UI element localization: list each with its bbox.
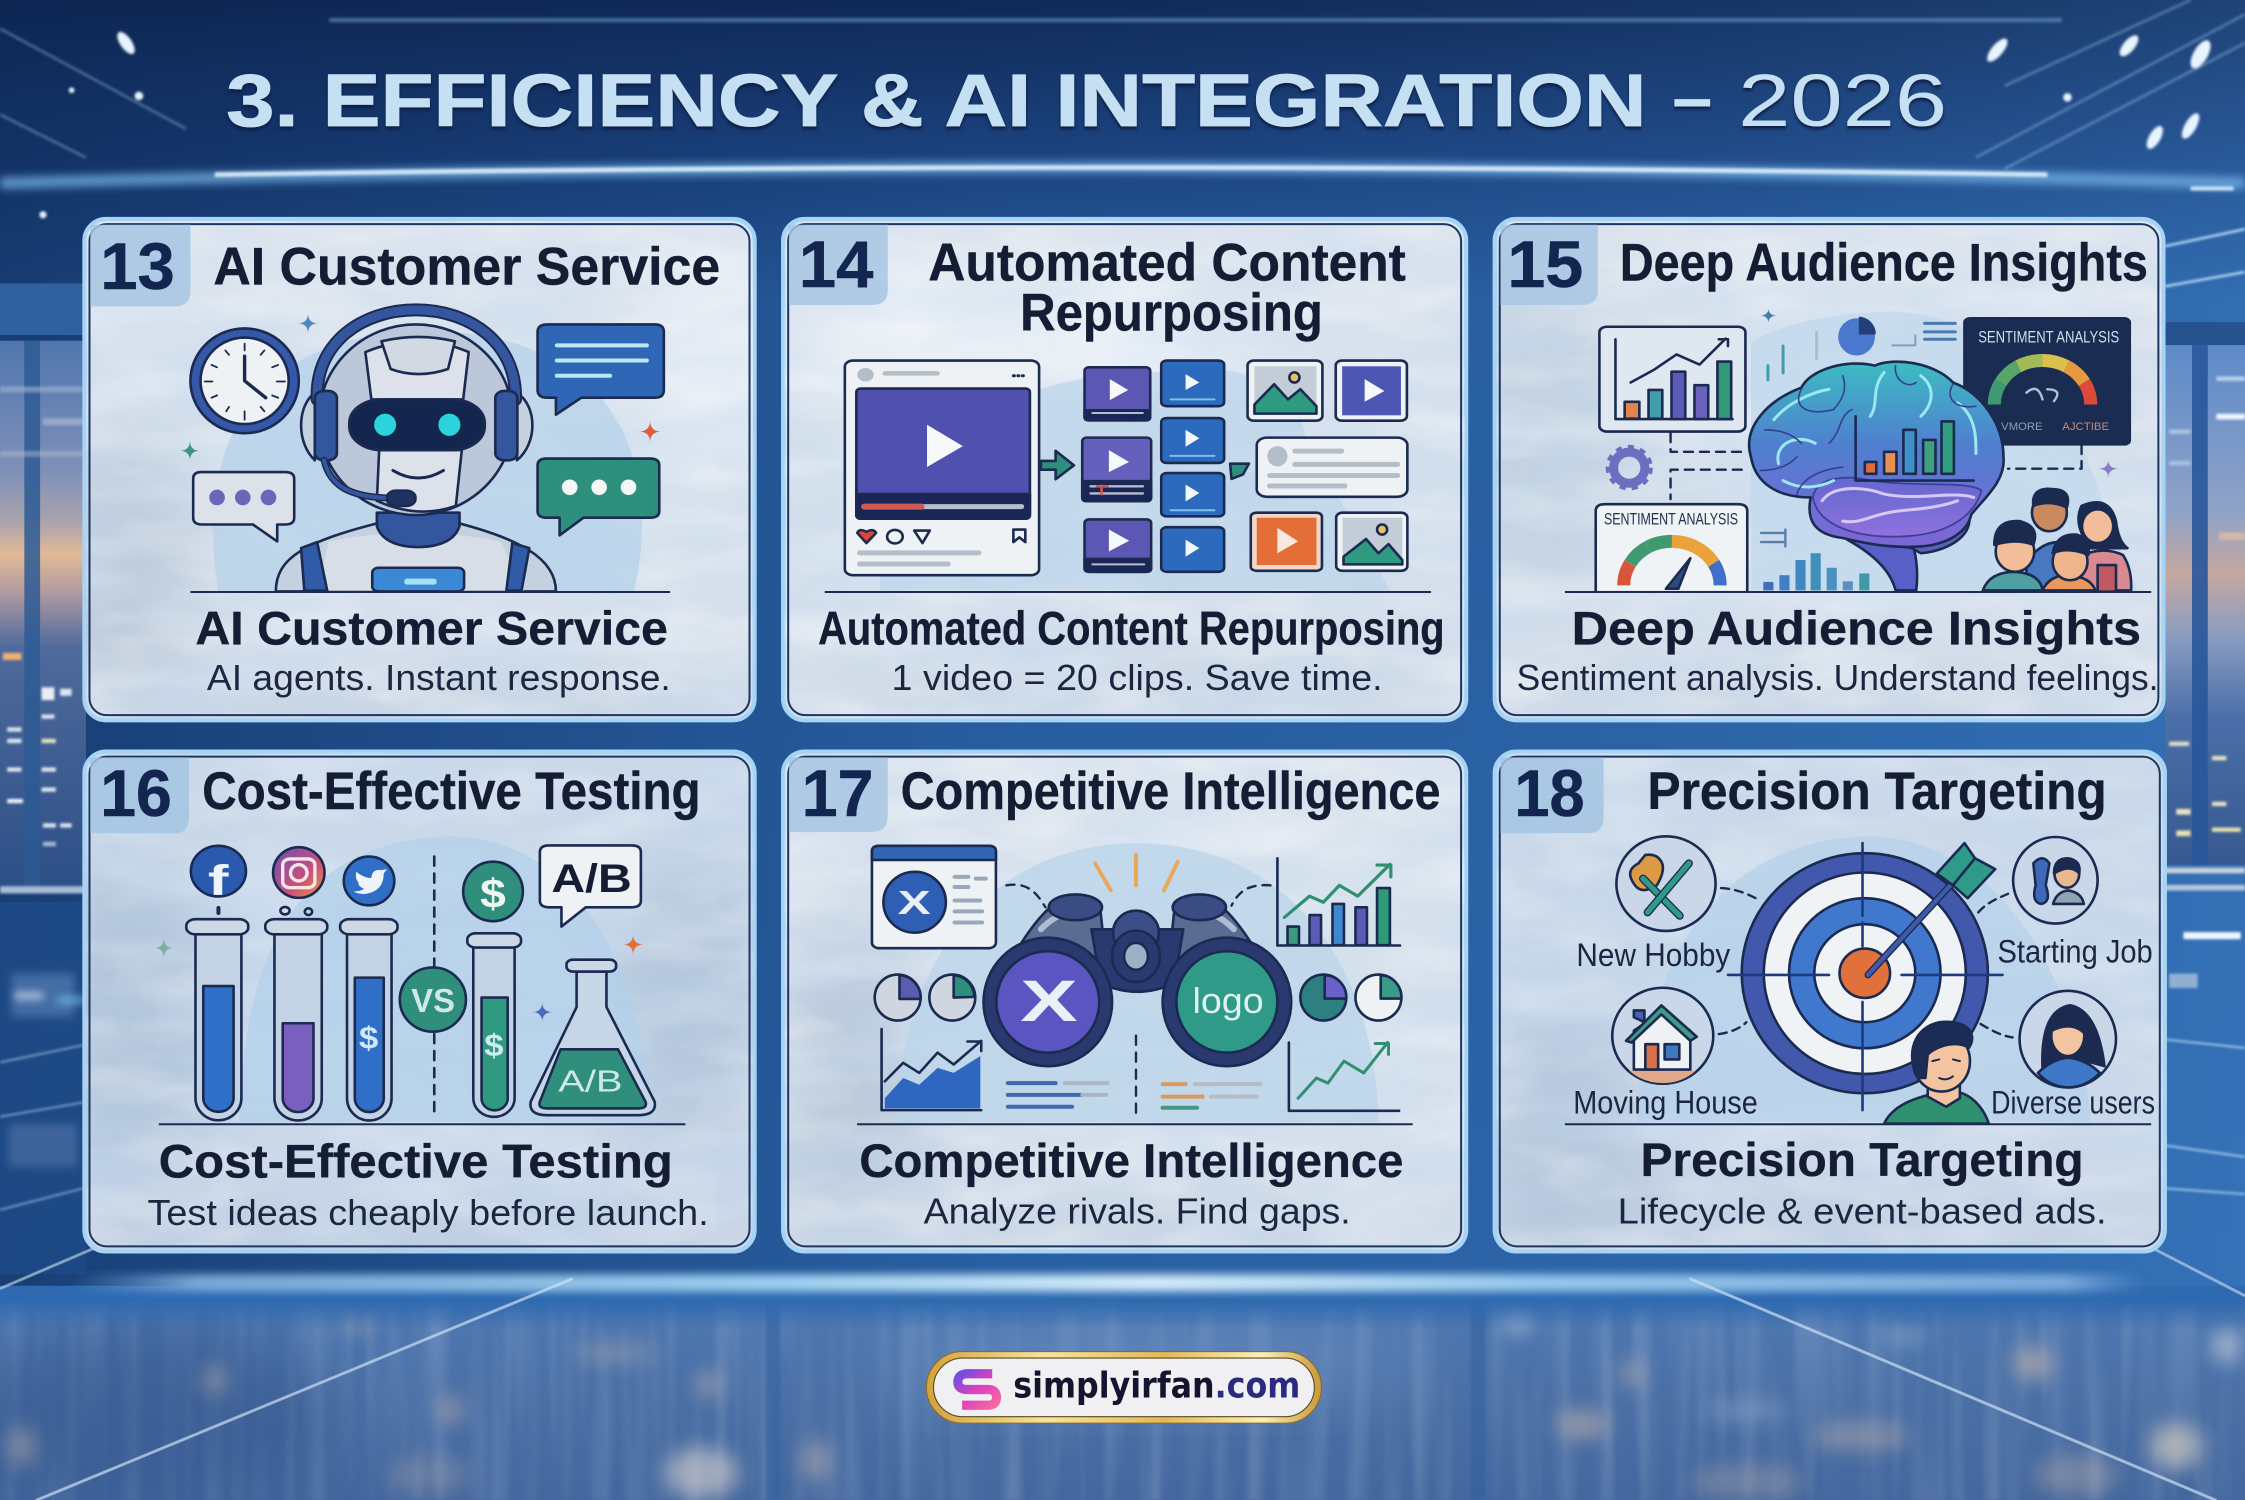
icon: green chat bubble xyxy=(538,459,659,535)
icon: clock xyxy=(190,328,299,433)
person xyxy=(1884,1022,1989,1124)
people group xyxy=(1983,489,2131,590)
icon: new hobby xyxy=(1616,836,1716,931)
divider line xyxy=(1565,1123,2151,1125)
number 13: 13 xyxy=(100,229,175,303)
footer title: Deep Audience Insights xyxy=(1572,602,2141,655)
illustration: target and life events xyxy=(1573,836,2155,1124)
footer title: Precision Targeting xyxy=(1641,1134,2084,1187)
footer description: AI agents. Instant response. xyxy=(207,658,671,698)
panel 17: Competitive Intelligence xyxy=(759,752,1489,1274)
arrow xyxy=(1041,451,1074,479)
sentiment panel dark xyxy=(1964,318,2130,444)
arrow xyxy=(1868,843,1995,975)
binoculars: logo xyxy=(1192,981,1264,1021)
target xyxy=(1728,843,2003,1110)
line chart xyxy=(1289,1043,1399,1111)
icon: starting job xyxy=(2013,837,2098,924)
flask: A/B xyxy=(558,1064,623,1098)
panel 16 card xyxy=(43,752,773,1274)
panel 14 card xyxy=(773,219,1489,745)
dollar coin: $ xyxy=(480,870,506,917)
divider line xyxy=(857,1123,1413,1125)
pies right xyxy=(1300,975,1401,1021)
sentiment panel dark: AJCTIBE xyxy=(2062,420,2109,432)
title: 2026 xyxy=(1738,59,1947,142)
icon: facebook xyxy=(191,846,246,913)
illustration: brain and insights xyxy=(1596,308,2137,590)
footer description: Lifecycle & event-based ads. xyxy=(1618,1191,2107,1231)
number 15: 15 xyxy=(1507,227,1583,301)
sentiment panel light xyxy=(1596,504,1747,590)
binoculars: X xyxy=(1020,968,1078,1034)
heading: Deep Audience Insights xyxy=(1620,234,2148,293)
icon: twitter xyxy=(344,857,394,905)
icon: grey chat bubble xyxy=(193,472,294,541)
heading: Repurposing xyxy=(1020,284,1323,343)
A/B bubble xyxy=(540,845,641,927)
illustration: video repurposing xyxy=(845,361,1407,590)
divider line xyxy=(190,591,670,593)
panel 14: Automated Content Repurposing xyxy=(773,219,1489,745)
tube 2 xyxy=(265,919,327,1120)
binoculars xyxy=(984,894,1291,1066)
icon: S logo xyxy=(958,1374,997,1405)
small bar chart xyxy=(1763,553,1869,590)
footer title: AI Customer Service xyxy=(195,602,668,655)
title: 3. EFFICIENCY & AI INTEGRATION xyxy=(226,59,1647,142)
label: starting job: Starting Job xyxy=(1998,934,2153,970)
icon: instagram xyxy=(273,847,325,915)
heading: Cost-Effective Testing xyxy=(202,762,701,821)
browser window: X xyxy=(898,884,931,922)
bar chart xyxy=(1277,858,1400,946)
panel 13 card xyxy=(82,216,757,722)
title xyxy=(226,56,1947,142)
illustration: binoculars xyxy=(872,843,1401,1122)
icon: pie xyxy=(1838,317,1876,355)
A/B bubble: A/B xyxy=(551,857,632,901)
number 18: 18 xyxy=(1514,756,1585,830)
blue clips column xyxy=(1161,361,1224,572)
panel 18: Precision Targeting xyxy=(1475,752,2165,1289)
media tiles xyxy=(1248,361,1407,571)
robot xyxy=(276,310,556,591)
social post with main video xyxy=(845,361,1039,575)
panel 13: AI Customer Service xyxy=(82,216,757,722)
illustration: A/B test tubes xyxy=(154,836,655,1122)
footer title: Competitive Intelligence xyxy=(859,1135,1403,1188)
sentiment panel light: SENTIMENT ANALYSIS xyxy=(1604,510,1738,529)
area chart xyxy=(882,1029,981,1110)
flask xyxy=(530,960,655,1115)
brain xyxy=(1749,362,2004,590)
label: new hobby: New Hobby xyxy=(1576,937,1731,973)
footer title: Automated Content Repurposing xyxy=(818,602,1445,655)
url text: simplyirfan.com xyxy=(1013,1365,1300,1406)
illustration: robot agent xyxy=(179,310,664,592)
tube 4: $ xyxy=(484,1028,504,1063)
panel 16: Cost-Effective Testing xyxy=(43,752,773,1274)
footer description: Sentiment analysis. Understand feelings. xyxy=(1517,658,2159,698)
number 14: 14 xyxy=(799,227,874,301)
panel 15: Deep Audience Insights xyxy=(1446,219,2176,745)
divider line xyxy=(159,1123,685,1125)
icon: blue chat bubble xyxy=(538,324,664,415)
vs badge xyxy=(400,967,466,1032)
panel 15 card xyxy=(1446,219,2176,745)
icon: moving house xyxy=(1612,988,1713,1084)
clips column xyxy=(1082,367,1151,572)
sentiment panel dark: VMORE xyxy=(2001,420,2043,432)
panel 18 card xyxy=(1475,752,2165,1289)
dollar coin xyxy=(463,862,523,921)
icon: facebook: f xyxy=(208,856,229,904)
label: moving house: Moving House xyxy=(1573,1085,1758,1121)
title: – xyxy=(1672,56,1712,139)
footer title: Cost-Effective Testing xyxy=(159,1136,673,1189)
divider line xyxy=(1565,591,2151,593)
heading: Automated Content xyxy=(928,234,1406,293)
number 17: 17 xyxy=(802,756,873,830)
sentiment panel dark: SENTIMENT ANALYSIS xyxy=(1978,328,2119,347)
tube 3: $ xyxy=(359,1020,379,1055)
divider line xyxy=(825,591,1431,593)
number 16: 16 xyxy=(100,756,172,830)
connectors xyxy=(1671,433,2082,499)
icon: gear xyxy=(1608,447,1650,488)
pies left xyxy=(875,975,975,1021)
browser window xyxy=(872,846,996,948)
panel 17 card xyxy=(759,752,1489,1274)
tube 3 xyxy=(340,919,398,1120)
heading: Competitive Intelligence xyxy=(901,762,1440,821)
logo pill: simplyirfan.com xyxy=(926,1352,1322,1423)
icon: diverse user xyxy=(2020,991,2116,1087)
heading: Precision Targeting xyxy=(1648,762,2107,821)
tube 1 xyxy=(186,919,248,1120)
tube 4 xyxy=(467,933,521,1117)
footer description: Test ideas cheaply before launch. xyxy=(147,1193,709,1233)
footer description: Analyze rivals. Find gaps. xyxy=(924,1191,1351,1231)
chart box xyxy=(1599,327,1745,432)
footer description: 1 video = 20 clips. Save time. xyxy=(892,658,1383,698)
vs badge: VS xyxy=(411,982,455,1020)
heading xyxy=(928,234,1406,343)
heading: AI Customer Service xyxy=(213,237,720,296)
